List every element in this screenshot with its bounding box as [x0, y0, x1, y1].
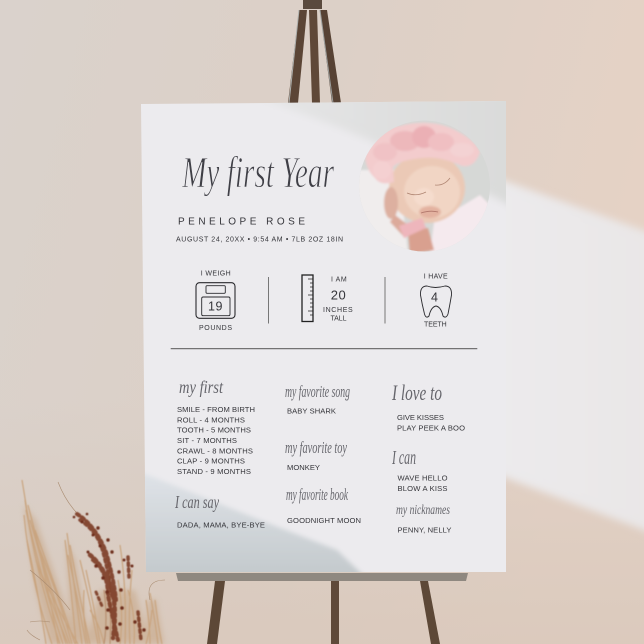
dried pampas plant — [22, 480, 165, 644]
column: my first list: ROLL - 4 MONTHS — [177, 415, 245, 424]
soft plume mass — [24, 505, 164, 644]
stat: teeth: 4 — [431, 291, 438, 305]
block: I can say: DADA, MAMA, BYE-BYE — [177, 521, 265, 530]
block: I love to: I love to — [391, 380, 442, 405]
stat: height — [302, 275, 353, 322]
divider — [384, 277, 386, 324]
easel ledge — [176, 573, 468, 581]
photo: sleeping baby in a circle — [361, 121, 490, 252]
block: favorite book: GOODNIGHT MOON — [287, 516, 361, 525]
block: favorite song: my favorite song — [285, 384, 350, 402]
block: favorite toy: MONKEY — [287, 463, 320, 472]
title script: My first Year — [181, 149, 334, 198]
stat: height: TALL — [330, 315, 347, 322]
name: PENELOPE ROSE — [178, 217, 305, 228]
block: favorite book — [286, 487, 361, 525]
stat: height: 20 — [331, 288, 346, 303]
birth details: AUGUST 24, 20XX • 9:54 AM • 7LB 2OZ 18IN — [176, 237, 343, 244]
column: my first list: SIT - 7 MONTHS — [177, 436, 237, 445]
icon: tooth — [420, 286, 452, 317]
block: I can: BLOW A KISS — [398, 484, 448, 493]
block: favorite toy: my favorite toy — [285, 440, 348, 458]
block: I can say — [174, 493, 265, 530]
block: I can: I can — [391, 446, 416, 469]
block: favorite song — [285, 384, 350, 416]
block: I can say: I can say — [174, 493, 219, 513]
block: my nicknames — [396, 501, 452, 535]
stat: weight: I WEIGH — [201, 271, 231, 278]
stat: teeth — [420, 273, 452, 329]
tan grass plumes — [22, 480, 162, 644]
icon: scale — [196, 283, 235, 318]
column: my first list: SMILE - FROM BIRTH — [177, 405, 255, 414]
divider rule — [171, 348, 477, 349]
block: favorite toy — [285, 440, 348, 472]
stat: height: I AM — [331, 276, 347, 283]
column: my first list: STAND - 9 MONTHS — [177, 467, 251, 476]
easel — [176, 0, 468, 644]
stat: teeth: I HAVE — [424, 273, 448, 280]
stat: height: INCHES — [323, 307, 353, 314]
stat: weight — [196, 271, 235, 332]
block: favorite book: my favorite book — [286, 487, 349, 505]
stat: teeth: TEETH — [424, 322, 447, 329]
column: my first list: CLAP - 9 MONTHS — [177, 457, 245, 466]
column: my first list: my first — [179, 378, 224, 398]
block: I can: WAVE HELLO — [398, 474, 448, 483]
easel bottom legs — [207, 581, 440, 644]
block: I love to: PLAY PEEK A BOO — [397, 424, 465, 433]
easel top legs — [288, 0, 341, 103]
rust seed heads — [73, 513, 146, 640]
block: I love to — [391, 380, 465, 433]
block: favorite song: BABY SHARK — [287, 407, 336, 416]
column: my first list: CRAWL - 8 MONTHS — [177, 446, 253, 455]
thin stems — [27, 482, 165, 640]
column: my first list — [177, 378, 255, 476]
stat: weight: POUNDS — [199, 325, 232, 332]
block: I can — [391, 446, 448, 493]
divider — [268, 277, 269, 324]
block: my nicknames: PENNY, NELLY — [398, 526, 452, 535]
column: my first list: TOOTH - 5 MONTHS — [177, 426, 251, 435]
stat: weight: 19 — [208, 300, 223, 314]
poster board — [141, 101, 506, 572]
block: I love to: GIVE KISSES — [397, 413, 444, 422]
block: my nicknames: my nicknames — [396, 501, 450, 517]
icon: ruler — [302, 275, 313, 322]
